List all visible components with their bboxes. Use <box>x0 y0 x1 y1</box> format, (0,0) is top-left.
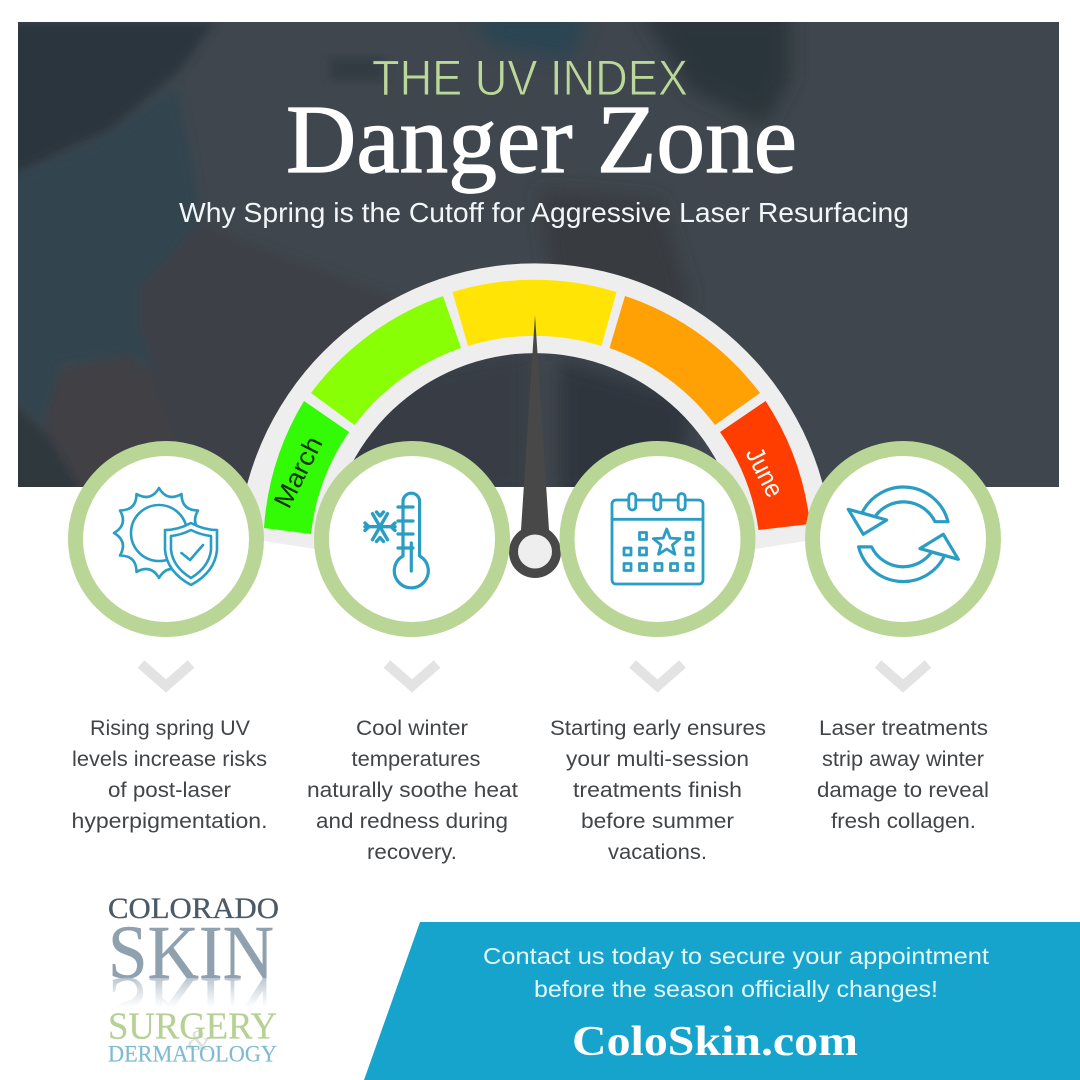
gauge segment: June <box>720 401 810 530</box>
logo: Colorado Skin Surgery and Dermatology: SURGERY <box>108 1006 277 1048</box>
text block: starting early: Starting early ensures <box>550 717 766 740</box>
text block: laser treatments: damage to reveal <box>817 779 989 802</box>
logo: Colorado Skin Surgery and Dermatology: COLORADO <box>108 892 279 925</box>
text block: rising UV: Rising spring UV <box>90 717 250 740</box>
website: ColoSkin.com <box>572 1019 858 1065</box>
panel: photo background header <box>10 12 1059 497</box>
gauge needle and hub <box>509 315 561 578</box>
text block: cool winter <box>307 717 518 864</box>
gauge segment: yellow <box>452 280 616 346</box>
text block: cool winter: naturally soothe heat <box>307 779 518 802</box>
gauge segment: orange <box>610 296 760 425</box>
circle: calendar icon <box>567 448 748 630</box>
gauge segment: lime <box>311 296 461 425</box>
icon: calendar with star <box>612 494 703 584</box>
text block: starting early: your multi-session <box>566 748 749 771</box>
text block: rising UV: of post-laser <box>108 779 231 802</box>
banner: call to action: before the season officially changes! <box>534 976 938 1002</box>
text block: starting early: vacations. <box>608 841 707 864</box>
circle: renewal arrows icon <box>812 448 994 630</box>
circle: cold thermometer icon <box>322 448 502 630</box>
heading: The UV Index: THE UV INDEX <box>372 50 688 106</box>
gauge segment: March <box>264 401 349 534</box>
banner: call to action <box>364 922 1080 1080</box>
text block: laser treatments: Laser treatments <box>819 717 988 740</box>
gauge: light grey track <box>238 263 832 551</box>
icon: sun with shield <box>114 488 217 585</box>
text block: cool winter: Cool winter <box>356 717 468 740</box>
chevron 3 <box>632 664 682 686</box>
logo: Colorado Skin Surgery and Dermatology: SKIN <box>108 911 274 995</box>
CTA text: Contact us today to secure your appointment <box>483 943 989 969</box>
text block: laser treatments <box>817 717 989 833</box>
chevron 2 <box>387 664 437 686</box>
text block: rising UV: levels increase risks <box>72 748 267 771</box>
icon: thermometer with snowflake <box>365 493 428 588</box>
text block: rising UV: hyperpigmentation. <box>72 810 268 833</box>
chevron 4 <box>878 664 928 686</box>
circle: sun and shield icon <box>76 448 256 630</box>
icon: circular arrows <box>848 487 958 582</box>
text block: cool winter: temperatures <box>352 748 480 771</box>
text block: cool winter: and redness during <box>316 810 508 833</box>
chevron 1 <box>141 664 191 686</box>
text block: starting early: treatments finish <box>573 779 742 802</box>
heading: Danger Zone: Danger Zone <box>286 86 797 193</box>
label: March: March <box>267 431 329 513</box>
label: June: June <box>740 442 790 502</box>
logo: Colorado Skin Surgery and Dermatology: DERMATOLOGY <box>108 1042 277 1066</box>
gauge <box>238 263 832 578</box>
logo: Colorado Skin Surgery and Dermatology <box>108 892 279 1066</box>
text block: starting early <box>550 717 766 864</box>
text block: laser treatments: fresh collagen. <box>831 810 976 833</box>
logo: Colorado Skin Surgery and Dermatology: SKIN <box>108 961 274 1045</box>
text block: rising UV <box>72 717 268 833</box>
text block: laser treatments: strip away winter <box>822 748 984 771</box>
logo: Colorado Skin Surgery and Dermatology: & <box>187 1024 211 1057</box>
subtitle: Why Spring is the Cutoff for Aggressive Laser Resurfacing <box>179 197 909 228</box>
text block: cool winter: recovery. <box>367 841 457 864</box>
text block: starting early: before summer <box>581 810 734 833</box>
